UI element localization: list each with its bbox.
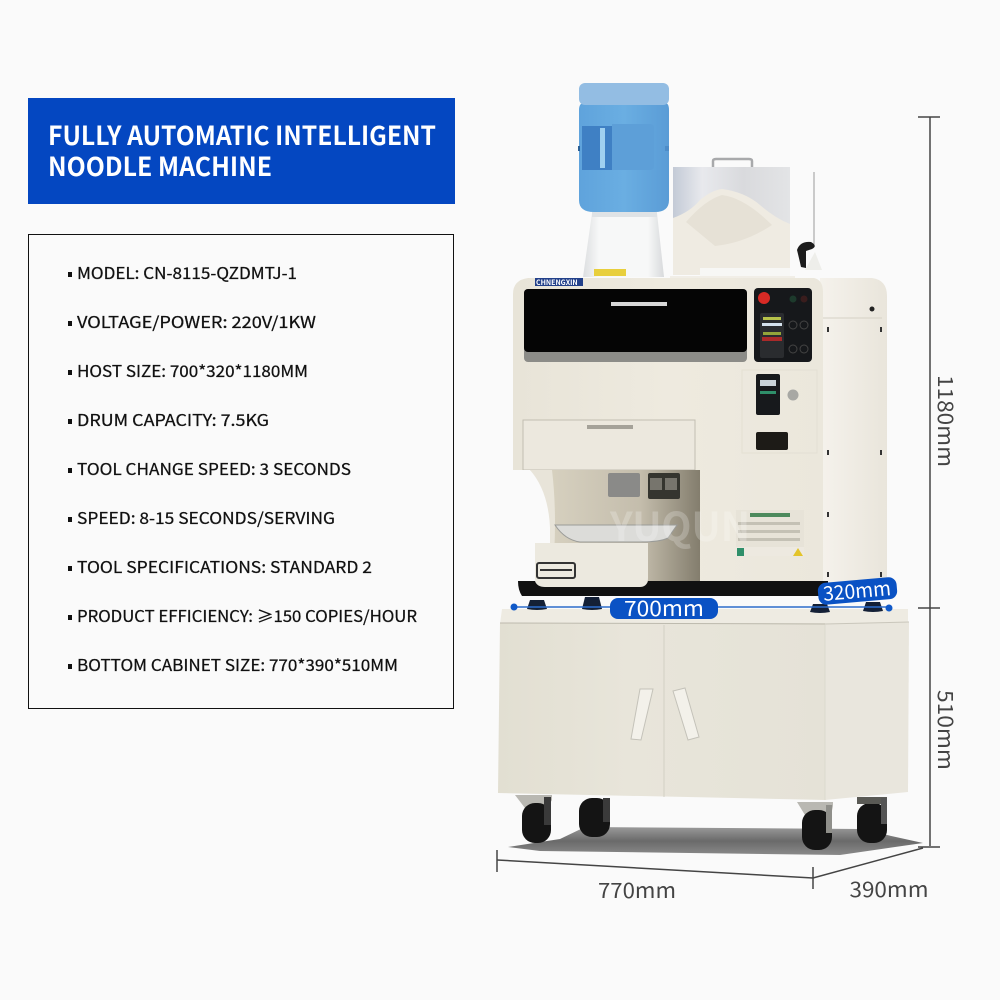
title banner: NOODLE MACHINE (48, 147, 272, 184)
noodle outlet cavity (510, 470, 700, 582)
dimension: 700mm with feet (510, 593, 892, 623)
dimension lines (497, 117, 940, 889)
panel: specifications: SPEED: 8-15 SECONDS/SERVING (77, 505, 335, 529)
title banner (28, 98, 455, 204)
dimension label: 770mm: 770mm (598, 875, 676, 905)
icon: flour drum (670, 159, 795, 279)
wheels (515, 795, 887, 850)
display window (524, 289, 747, 362)
dimension label: 390mm: 390mm (850, 874, 928, 904)
machine base (535, 543, 648, 587)
machine body (510, 278, 887, 587)
machine body: CHNENGXIN (536, 278, 578, 288)
icon: water bottle on stand (578, 83, 669, 277)
panel: specifications: MODEL: CN-8115-QZDMTJ-1 (77, 260, 297, 284)
icon: antenna and tap (797, 172, 822, 270)
control panel (754, 288, 812, 362)
dimension label: 1180mm: 1180mm (931, 375, 961, 467)
cabinet (498, 609, 909, 800)
floor shadow (508, 827, 923, 855)
panel: specifications: HOST SIZE: 700*320*1180MM (77, 358, 308, 382)
dimension label: 510mm: 510mm (931, 690, 961, 770)
panel: specifications: PRODUCT EFFICIENCY: ≥150 COPIES/HOUR (77, 603, 417, 627)
small control area (742, 370, 817, 453)
machine base plate and feet (518, 581, 828, 596)
panel: specifications (28, 234, 454, 708)
panel: specifications: TOOL SPECIFICATIONS: STANDARD 2 (77, 554, 372, 578)
drawer (523, 420, 695, 470)
panel: specifications: DRUM CAPACITY: 7.5KG (77, 407, 269, 431)
cabinet handles (631, 688, 699, 740)
dimension: 320mm: 320mm (822, 572, 892, 607)
instruction label (736, 510, 804, 556)
dimension: 700mm with feet: 700mm (624, 593, 704, 623)
panel: specifications: BOTTOM CABINET SIZE: 770*390*510MM (77, 652, 398, 676)
title banner: FULLY AUTOMATIC INTELLIGENT (48, 116, 436, 153)
panel: specifications: TOOL CHANGE SPEED: 3 SECONDS (77, 456, 351, 480)
watermark: YUQUN (609, 495, 750, 553)
panel: specifications: VOLTAGE/POWER: 220V/1KW (77, 309, 316, 333)
plate (555, 525, 677, 542)
